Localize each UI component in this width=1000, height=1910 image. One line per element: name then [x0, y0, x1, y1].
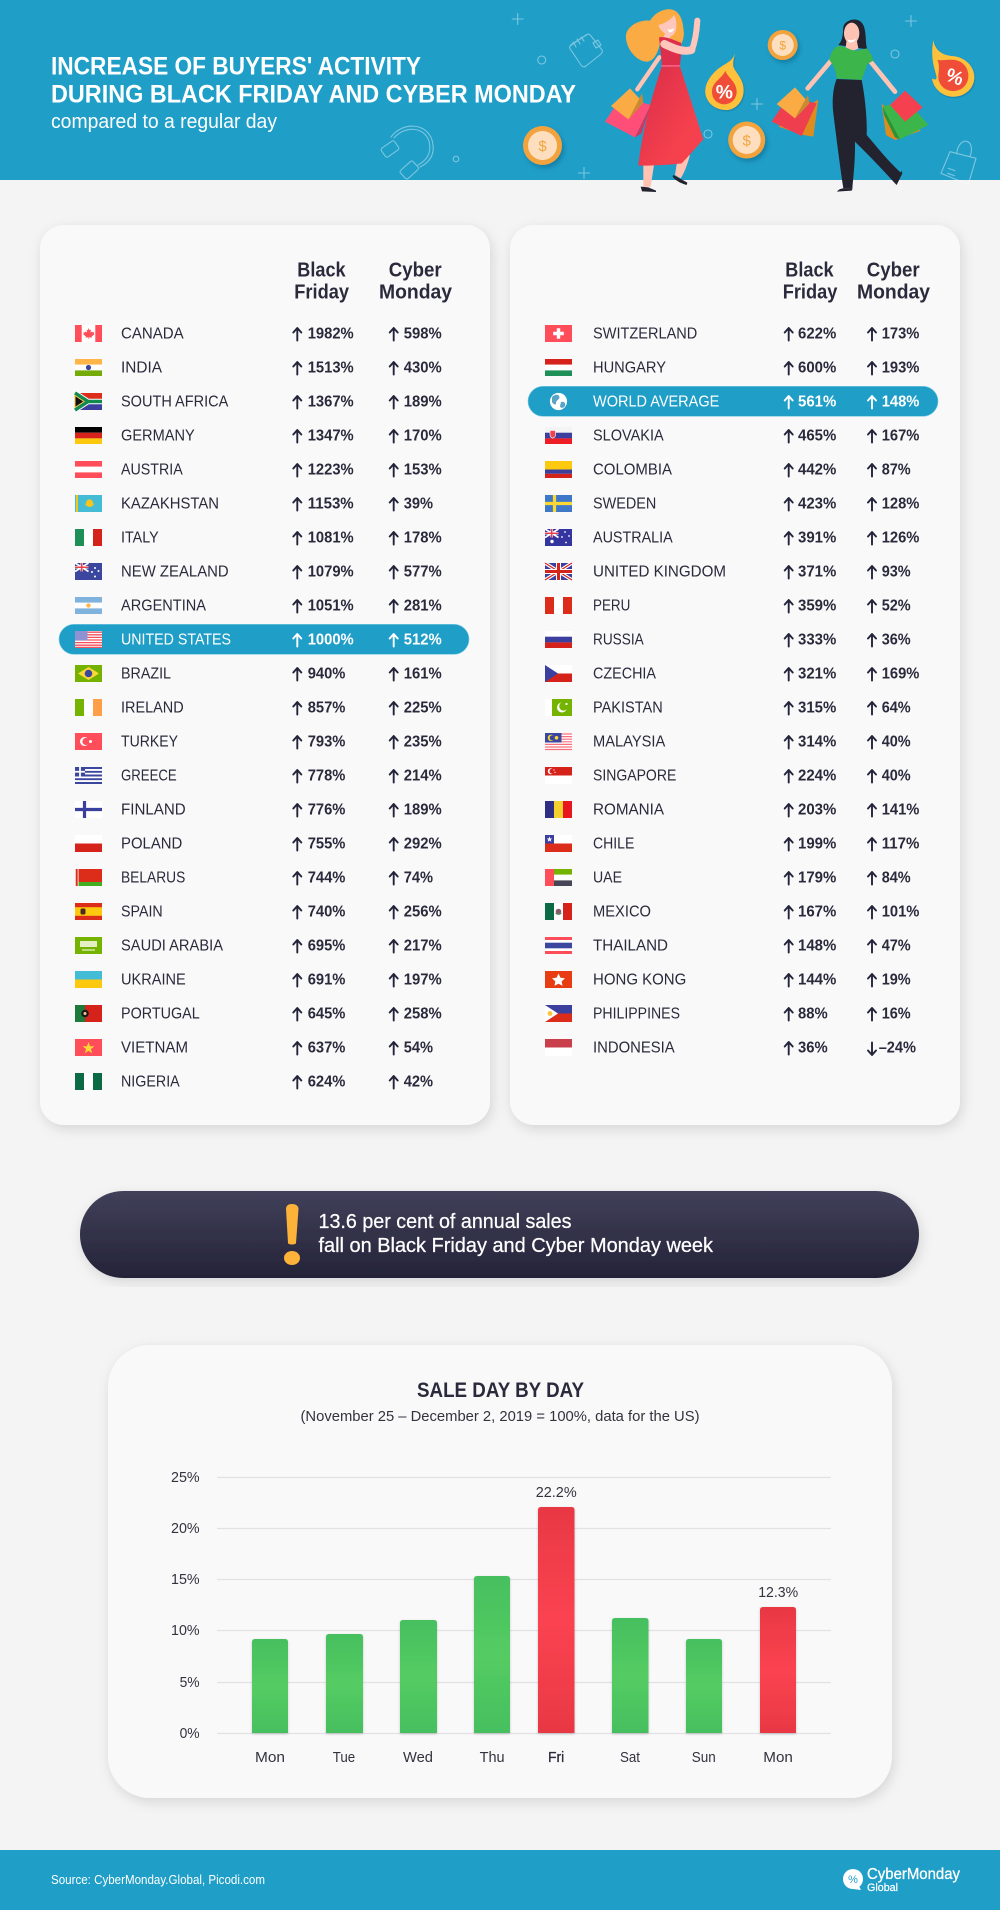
x axis labels: Tue — [333, 1749, 355, 1766]
flame: right percent — [932, 40, 974, 97]
subtitle: compared to a regular day — [51, 111, 277, 133]
row: Italy: 178% — [404, 529, 442, 546]
row: Hong Kong: HONG KONG — [593, 971, 686, 988]
row: Hong Kong: 144% — [798, 971, 836, 988]
flag: Russia — [545, 631, 572, 648]
row: Malaysia — [545, 733, 911, 750]
panel: sale day by day — [108, 1345, 892, 1798]
column headings: left: Black — [297, 260, 346, 282]
flag: Saudi Arabia — [75, 937, 102, 954]
row: Canada — [75, 325, 442, 342]
row: Ukraine: 197% — [404, 971, 442, 988]
row: Indonesia: –24% — [879, 1039, 916, 1056]
row: Spain — [75, 903, 442, 920]
y axis labels: 10% — [171, 1622, 200, 1639]
row: Malaysia: MALAYSIA — [593, 733, 666, 750]
row: Belarus — [75, 869, 433, 886]
row: Kazakhstan: 1153% — [308, 495, 354, 512]
row: Mexico: 101% — [882, 903, 920, 920]
row: Sweden: 128% — [882, 495, 920, 512]
row: United States highlighted: 1000% — [308, 631, 354, 648]
y axis labels: 0% — [180, 1725, 200, 1742]
row: Poland: 292% — [404, 835, 442, 852]
row: Ireland: 857% — [308, 699, 346, 716]
row: Philippines: 88% — [798, 1005, 828, 1022]
x axis labels: Wed — [403, 1749, 433, 1766]
row: Saudi Arabia: 217% — [404, 937, 442, 954]
x axis labels: Mon — [255, 1749, 285, 1766]
row: Indonesia: INDONESIA — [593, 1039, 675, 1056]
row: United Kingdom: 371% — [798, 563, 836, 580]
coin: top — [768, 30, 798, 60]
row: Slovakia: 465% — [798, 427, 836, 444]
row: Switzerland: 622% — [798, 325, 836, 342]
y axis labels: 20% — [171, 1520, 200, 1537]
row: Russia: RUSSIA — [593, 631, 644, 648]
row: Hungary — [545, 359, 920, 376]
x axis labels — [255, 1749, 793, 1766]
flag: South Africa — [75, 393, 102, 410]
logo: CyberMonday Global: CyberMonday — [867, 1866, 960, 1883]
row: Italy: ITALY — [121, 529, 159, 546]
row: New Zealand — [75, 563, 442, 580]
row: Vietnam: VIETNAM — [121, 1039, 188, 1056]
row: United Kingdom — [545, 563, 911, 580]
coin: middle — [728, 122, 765, 158]
row: Greece: GREECE — [121, 767, 177, 784]
row: Hong Kong: 19% — [882, 971, 911, 988]
row: Canada: 598% — [404, 325, 442, 342]
row: Indonesia — [545, 1039, 916, 1056]
row: Colombia — [545, 461, 911, 478]
row: Switzerland — [545, 325, 920, 342]
flag: UAE — [545, 869, 572, 886]
row: Hong Kong — [545, 971, 911, 988]
column headings: right: Cyber — [867, 260, 920, 282]
row: Singapore: SINGAPORE — [593, 767, 676, 784]
header line icons — [380, 14, 976, 184]
row: Indonesia: 36% — [798, 1039, 828, 1056]
row: Germany — [75, 427, 442, 444]
coin: left — [523, 126, 562, 165]
row: UAE: 179% — [798, 869, 836, 886]
row: World average highlighted: WORLD AVERAGE — [593, 393, 719, 410]
row: South Africa: 1367% — [308, 393, 354, 410]
row: United States highlighted: 512% — [404, 631, 442, 648]
row: Saudi Arabia: SAUDI ARABIA — [121, 937, 223, 954]
row: Poland — [75, 835, 442, 852]
callout text: fall on Black Friday and Cyber Monday week — [318, 1235, 714, 1257]
flag: Hong Kong — [545, 971, 572, 988]
row: South Africa: SOUTH AFRICA — [121, 393, 229, 410]
flag: Italy — [75, 529, 102, 546]
flag: Kazakhstan — [75, 495, 102, 512]
row: Austria: AUSTRIA — [121, 461, 183, 478]
row: Colombia: COLOMBIA — [593, 461, 672, 478]
flag: Singapore — [545, 767, 572, 784]
row: Slovakia: SLOVAKIA — [593, 427, 664, 444]
row: Kazakhstan — [75, 495, 433, 512]
row: Germany: GERMANY — [121, 427, 195, 444]
row: Sweden: SWEDEN — [593, 495, 656, 512]
row: Slovakia: 167% — [882, 427, 920, 444]
flag: Ireland — [75, 699, 102, 716]
column headings: left: Monday — [379, 282, 453, 304]
x axis labels: Sat — [620, 1749, 641, 1766]
row: Singapore: 40% — [882, 767, 911, 784]
callout text — [318, 1211, 714, 1257]
row: Canada: 1982% — [308, 325, 354, 342]
row: Czechia: 169% — [882, 665, 920, 682]
x axis labels: Mon — [763, 1749, 793, 1766]
row: Chile — [545, 835, 920, 852]
flag: Philippines — [545, 1005, 572, 1022]
y axis labels: 15% — [171, 1571, 200, 1588]
row: Poland: POLAND — [121, 835, 182, 852]
chart title: SALE DAY BY DAY — [417, 1379, 584, 1402]
row: Chile: 117% — [882, 835, 920, 852]
bar chart — [171, 1469, 831, 1766]
row: Peru: 52% — [882, 597, 911, 614]
row: Romania: ROMANIA — [593, 801, 664, 818]
row: Romania: 203% — [798, 801, 836, 818]
title: DURING BLACK FRIDAY AND CYBER MONDAY — [51, 80, 576, 108]
footer — [0, 1850, 1000, 1910]
row: Ukraine: UKRAINE — [121, 971, 186, 988]
row: Sweden: 423% — [798, 495, 836, 512]
flag: Belarus — [75, 869, 102, 886]
row: Belarus: BELARUS — [121, 869, 185, 886]
row: United Kingdom: 93% — [882, 563, 911, 580]
row: Brazil: 940% — [308, 665, 346, 682]
row: Philippines: 16% — [882, 1005, 911, 1022]
row: Saudi Arabia: 695% — [308, 937, 346, 954]
row: Czechia — [545, 665, 920, 682]
flag: Mexico — [545, 903, 572, 920]
row: Pakistan: 64% — [882, 699, 911, 716]
row: India: 1513% — [308, 359, 354, 376]
column headings: right — [783, 260, 931, 304]
flag: Czechia — [545, 665, 572, 682]
coin: left: $ — [538, 138, 547, 155]
flame: left percent — [705, 53, 744, 110]
row: Brazil: 161% — [404, 665, 442, 682]
flag: Portugal — [75, 1005, 102, 1022]
x axis labels: Fri — [548, 1749, 564, 1766]
icon: globe — [550, 393, 567, 410]
row: Switzerland: SWITZERLAND — [593, 325, 697, 342]
callout text: 13.6 per cent of annual sales — [318, 1211, 572, 1233]
flag: Canada — [75, 325, 102, 342]
row: Austria — [75, 461, 442, 478]
row: Turkey — [75, 733, 442, 750]
logo: CyberMonday Global — [843, 1866, 960, 1894]
row: Austria: 1223% — [308, 461, 354, 478]
row: Nigeria: NIGERIA — [121, 1073, 180, 1090]
flag: Australia — [545, 529, 572, 546]
row: Hungary: HUNGARY — [593, 359, 666, 376]
panel: right country table — [510, 225, 960, 1125]
row: Argentina: ARGENTINA — [121, 597, 206, 614]
row: Russia: 333% — [798, 631, 836, 648]
flag: Turkey — [75, 733, 102, 750]
flag: Pakistan — [545, 699, 572, 716]
row: Hungary: 193% — [882, 359, 920, 376]
row: Greece: 214% — [404, 767, 442, 784]
row: Vietnam: 637% — [308, 1039, 346, 1056]
row: Philippines: PHILIPPINES — [593, 1005, 680, 1022]
value labels — [536, 1484, 798, 1601]
flag: New Zealand — [75, 563, 102, 580]
flag: Slovakia — [545, 427, 572, 444]
illustration: shoppers — [605, 9, 974, 192]
row: Vietnam — [75, 1039, 433, 1056]
flag: Malaysia — [545, 733, 572, 750]
row: Italy: 1081% — [308, 529, 354, 546]
y axis labels: 25% — [171, 1469, 200, 1486]
flag: Chile — [545, 835, 572, 852]
row: Colombia: 442% — [798, 461, 836, 478]
flag: Finland — [75, 801, 102, 818]
row: Germany: 170% — [404, 427, 442, 444]
row: Chile: CHILE — [593, 835, 634, 852]
icon: exclamation mark — [284, 1204, 300, 1265]
row: Thailand: THAILAND — [593, 937, 668, 954]
row: UAE: 84% — [882, 869, 911, 886]
row: Nigeria: 624% — [308, 1073, 346, 1090]
row: Czechia: CZECHIA — [593, 665, 656, 682]
source: Source: CyberMonday.Global, Picodi.com — [51, 1872, 265, 1887]
row: Pakistan — [545, 699, 911, 716]
flag: Nigeria — [75, 1073, 102, 1090]
row: New Zealand: 577% — [404, 563, 442, 580]
x axis labels: Sun — [692, 1749, 716, 1766]
column headings: left: Friday — [294, 282, 350, 304]
row: Thailand — [545, 937, 911, 954]
row: Malaysia: 40% — [882, 733, 911, 750]
row: Greece: 778% — [308, 767, 346, 784]
flag: Indonesia — [545, 1039, 572, 1056]
flame: right percent: % — [943, 65, 966, 91]
woman in green shirt — [772, 19, 928, 192]
coin: top: $ — [779, 38, 786, 52]
row: Peru — [545, 597, 911, 614]
flag: Austria — [75, 461, 102, 478]
row: South Africa — [75, 393, 442, 410]
column headings: right: Black — [785, 260, 834, 282]
row: Chile: 199% — [798, 835, 836, 852]
row: New Zealand: 1079% — [308, 563, 354, 580]
row: Belarus: 74% — [404, 869, 433, 886]
row: South Africa: 189% — [404, 393, 442, 410]
row: Thailand: 148% — [798, 937, 836, 954]
row: Thailand: 47% — [882, 937, 911, 954]
row: Turkey: 235% — [404, 733, 442, 750]
row: Nigeria: 42% — [404, 1073, 433, 1090]
row: Belarus: 744% — [308, 869, 346, 886]
row: Australia: 126% — [882, 529, 920, 546]
row: Australia: 391% — [798, 529, 836, 546]
row: Slovakia — [545, 427, 920, 444]
row: United States highlighted: UNITED STATES — [121, 631, 231, 648]
flag: Peru — [545, 597, 572, 614]
row: Mexico: MEXICO — [593, 903, 651, 920]
row: Russia: 36% — [882, 631, 911, 648]
column headings: right: Monday — [857, 282, 931, 304]
row: Malaysia: 314% — [798, 733, 836, 750]
row: Spain: SPAIN — [121, 903, 163, 920]
row: Saudi Arabia — [75, 937, 442, 954]
title — [51, 52, 576, 108]
panel: left country table — [40, 225, 490, 1125]
row: United States highlighted — [59, 624, 469, 654]
flag: Spain — [75, 903, 102, 920]
row: Brazil — [75, 665, 442, 682]
row: Ukraine: 691% — [308, 971, 346, 988]
woman in red dress — [605, 9, 703, 192]
value labels: 22.2% — [536, 1484, 577, 1501]
row: Pakistan: PAKISTAN — [593, 699, 663, 716]
row: Austria: 153% — [404, 461, 442, 478]
row: UAE — [545, 869, 911, 886]
row: Spain: 740% — [308, 903, 346, 920]
row: Poland: 755% — [308, 835, 346, 852]
row: Australia: AUSTRALIA — [593, 529, 673, 546]
flag: Colombia — [545, 461, 572, 478]
row: Colombia: 87% — [882, 461, 911, 478]
row: Portugal: 645% — [308, 1005, 346, 1022]
flag: Vietnam — [75, 1039, 102, 1056]
flag: Ukraine — [75, 971, 102, 988]
row: Turkey: 793% — [308, 733, 346, 750]
row: Singapore: 224% — [798, 767, 836, 784]
column headings: left: Cyber — [389, 260, 442, 282]
flag: Brazil — [75, 665, 102, 682]
row: Finland: 776% — [308, 801, 346, 818]
flag: Argentina — [75, 597, 102, 614]
value labels: 12.3% — [758, 1584, 798, 1601]
flag: Poland — [75, 835, 102, 852]
y axis labels: 5% — [180, 1674, 200, 1691]
row: Australia — [545, 529, 920, 546]
row: Spain: 256% — [404, 903, 442, 920]
row: Kazakhstan: 39% — [404, 495, 433, 512]
x axis labels: Thu — [480, 1749, 505, 1766]
row: Canada: CANADA — [121, 325, 184, 342]
row: United Kingdom: UNITED KINGDOM — [593, 563, 726, 580]
logo: CyberMonday Global: Global — [867, 1882, 898, 1894]
flag: Switzerland — [545, 325, 572, 342]
column headings: left — [294, 260, 453, 304]
row: Czechia: 321% — [798, 665, 836, 682]
row: Philippines — [545, 1005, 911, 1022]
y axis labels — [171, 1469, 200, 1742]
row: Romania: 141% — [882, 801, 920, 818]
flag: Hungary — [545, 359, 572, 376]
row: Portugal: 258% — [404, 1005, 442, 1022]
row: Hungary: 600% — [798, 359, 836, 376]
row: Finland: FINLAND — [121, 801, 186, 818]
flag: United States — [75, 631, 102, 648]
coin: middle: $ — [743, 132, 752, 150]
row: Brazil: BRAZIL — [121, 665, 171, 682]
row: Ireland: IRELAND — [121, 699, 184, 716]
row: Germany: 1347% — [308, 427, 354, 444]
row: World average highlighted: 148% — [882, 393, 920, 410]
row: Peru: PERU — [593, 597, 630, 614]
row: Argentina — [75, 597, 442, 614]
column headings: right: Friday — [783, 282, 838, 304]
row: Switzerland: 173% — [882, 325, 920, 342]
row: Nigeria — [75, 1073, 433, 1090]
row: UAE: UAE — [593, 869, 622, 886]
row: Ireland — [75, 699, 442, 716]
row: Singapore — [545, 767, 911, 784]
flag: United Kingdom — [545, 563, 572, 580]
row: Italy — [75, 529, 442, 546]
flag: India — [75, 359, 102, 376]
row: Mexico — [545, 903, 920, 920]
row: Finland — [75, 801, 442, 818]
row: Romania — [545, 801, 920, 818]
row: Pakistan: 315% — [798, 699, 836, 716]
row: India: 430% — [404, 359, 442, 376]
row: Argentina: 1051% — [308, 597, 354, 614]
logo: CyberMonday Global: % — [848, 1874, 858, 1886]
title: INCREASE OF BUYERS' ACTIVITY — [51, 52, 421, 80]
flag: Germany — [75, 427, 102, 444]
row: Russia — [545, 631, 911, 648]
row: Portugal: PORTUGAL — [121, 1005, 200, 1022]
row: Kazakhstan: KAZAKHSTAN — [121, 495, 219, 512]
row: Ukraine — [75, 971, 442, 988]
row: Portugal — [75, 1005, 442, 1022]
row: Finland: 189% — [404, 801, 442, 818]
callout: annual sales — [80, 1191, 919, 1278]
row: Ireland: 225% — [404, 699, 442, 716]
row: India: INDIA — [121, 359, 162, 376]
row: Peru: 359% — [798, 597, 836, 614]
row: New Zealand: NEW ZEALAND — [121, 563, 229, 580]
row: Vietnam: 54% — [404, 1039, 433, 1056]
flag: Greece — [75, 767, 102, 784]
bars — [252, 1507, 796, 1733]
row: Argentina: 281% — [404, 597, 442, 614]
row: Sweden — [545, 495, 920, 512]
header banner — [0, 0, 1000, 180]
row: Greece — [75, 767, 442, 784]
row: Mexico: 167% — [798, 903, 836, 920]
flag: Romania — [545, 801, 572, 818]
chart subtitle: (November 25 – December 2, 2019 = 100%, data for the US) — [300, 1408, 700, 1425]
row: Turkey: TURKEY — [121, 733, 178, 750]
row: World average highlighted: 561% — [798, 393, 836, 410]
flag: Thailand — [545, 937, 572, 954]
flame: left percent: % — [716, 82, 733, 103]
row: India — [75, 359, 442, 376]
flag: Sweden — [545, 495, 572, 512]
row: World average highlighted — [528, 386, 938, 416]
